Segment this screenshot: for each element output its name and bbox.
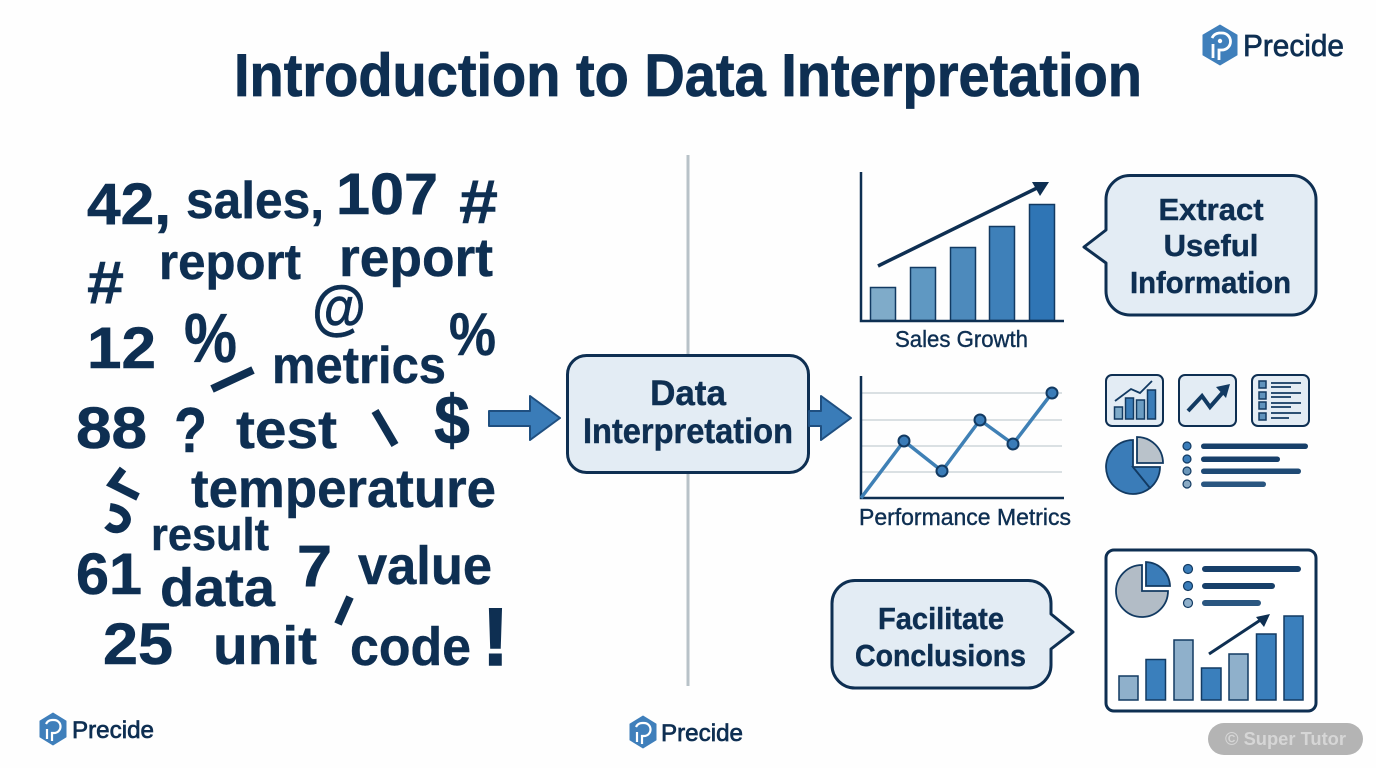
callout: facilitate conclusions: [832, 580, 1073, 688]
trend arrow: [878, 182, 1049, 266]
panel: raw data word cloud: [76, 162, 509, 683]
raw data: 12: 12: [87, 316, 156, 381]
raw data: value: value: [358, 536, 492, 596]
raw data: percent: %: [449, 301, 496, 368]
callout: facilitate conclusions: Facilitate: [878, 601, 1004, 636]
logo: top right: [1203, 25, 1344, 65]
arrow: raw data to interpretation: [489, 396, 560, 440]
chart label: Performance Metrics: [859, 504, 1071, 530]
raw data: metrics: metrics: [272, 337, 446, 395]
watermark: super tutor: © Super Tutor: [1225, 729, 1346, 749]
raw data: slash: [212, 370, 253, 389]
raw data: data: data: [160, 558, 276, 618]
logo: bottom centre: Precide: [661, 720, 743, 747]
icon: checklist tile: [1252, 375, 1309, 426]
logo: bottom centre: [630, 716, 743, 748]
dashboard bars: [1119, 616, 1303, 700]
icon: bar and line tile: [1106, 375, 1163, 426]
logo: bottom left: [40, 713, 154, 745]
raw data: report: report: [339, 228, 493, 288]
callout: facilitate conclusions: Conclusions: [855, 638, 1026, 673]
raw data: question mark: ?: [174, 394, 207, 466]
raw data: hash: #: [459, 168, 498, 237]
chart: performance metrics: [859, 376, 1071, 530]
raw data: broken symbols: [107, 469, 138, 529]
metrics line: [861, 393, 1052, 498]
divider: [686, 155, 690, 686]
chart: sales growth: [861, 172, 1064, 352]
icon: legend list: [1183, 442, 1308, 488]
callout: extract useful information: Extract: [1158, 192, 1264, 227]
raw data: 88: 88: [76, 396, 147, 461]
logo: top right: Precide: [1243, 28, 1344, 63]
dashboard arrow: [1209, 614, 1270, 654]
raw data: temperature: temperature: [191, 459, 496, 519]
dashboard pie: [1116, 562, 1170, 617]
logo: bottom left: Precide: [72, 717, 154, 744]
arrow: interpretation to outputs: [809, 396, 851, 440]
raw data: 7: 7: [297, 534, 332, 599]
dashboard legend: [1184, 564, 1301, 608]
sales bars: [870, 204, 1054, 320]
raw data: 61: 61: [76, 542, 142, 607]
raw data: hash: #: [87, 249, 124, 316]
raw data: percent: %: [184, 299, 237, 377]
panel: data interpretation: [568, 356, 808, 472]
raw data: 107: 107: [336, 162, 438, 227]
callout: extract useful information: Information: [1130, 265, 1291, 300]
icon: trend tile: [1179, 375, 1236, 426]
title: Introduction to Data Interpretation: [234, 42, 1142, 109]
callout: extract useful information: Useful: [1164, 228, 1258, 263]
panel: data interpretation: Data: [650, 374, 726, 413]
raw data: 25: 25: [103, 612, 173, 677]
callout: extract useful information: [1084, 176, 1316, 315]
panel: dashboard: [1106, 550, 1316, 711]
raw data: result: result: [151, 509, 269, 560]
metrics points: [898, 388, 1058, 476]
raw data: 42,: 42,: [87, 172, 171, 237]
raw data: tick: [338, 597, 350, 624]
raw data: exclamation: !: [482, 592, 509, 683]
icon: pie chart: [1106, 437, 1163, 494]
chart label: Sales Growth: [895, 326, 1028, 352]
raw data: code: code: [350, 617, 471, 677]
raw data: backslash: [375, 411, 395, 445]
raw data: at sign: @: [312, 274, 366, 341]
raw data: test: test: [236, 400, 337, 460]
raw data: report: report: [159, 234, 301, 290]
raw data: dollar: $: [434, 381, 470, 459]
panel: data interpretation: Interpretation: [583, 412, 793, 451]
raw data: sales,: sales,: [186, 172, 324, 230]
raw data: unit: unit: [213, 616, 317, 676]
watermark: super tutor: [1208, 723, 1363, 755]
